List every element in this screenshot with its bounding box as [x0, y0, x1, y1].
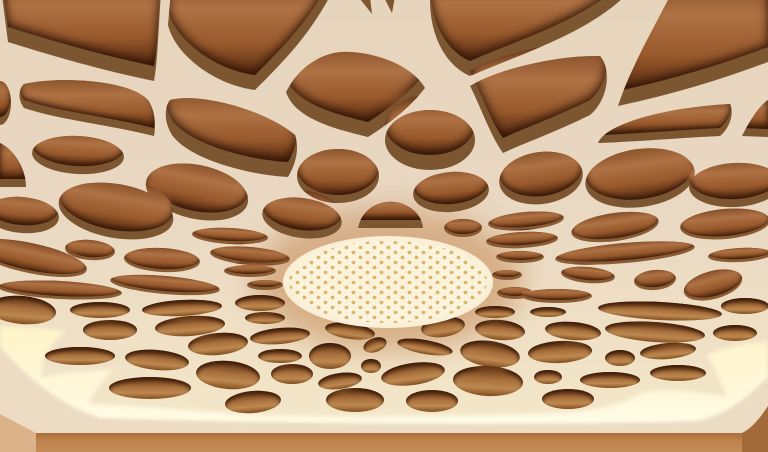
mid-ring slim cut-outs	[0, 205, 768, 306]
warm halo around chandelier	[253, 208, 523, 352]
wall: left	[0, 414, 36, 452]
cove light glow	[0, 320, 768, 424]
wall: back	[36, 433, 742, 452]
large top cut-outs	[0, 0, 768, 177]
wall: right	[742, 406, 768, 452]
chandelier	[283, 236, 493, 328]
lower lit cut-outs	[0, 293, 768, 415]
upper medium cut-outs	[0, 80, 768, 248]
